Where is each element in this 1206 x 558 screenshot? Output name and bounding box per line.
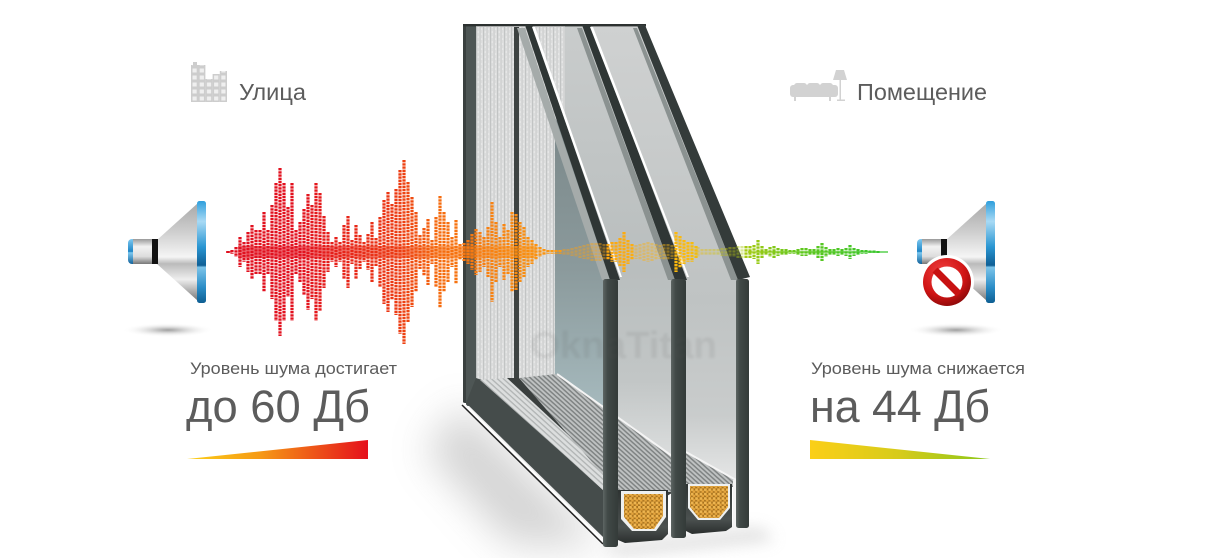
white frame edge xyxy=(463,403,603,541)
glass between first and second pane xyxy=(565,26,680,470)
third sill white trim xyxy=(686,452,736,480)
right value: на 44 Дб xyxy=(810,381,990,432)
pane 1 diagonal edge xyxy=(517,25,622,280)
wave: tail xyxy=(226,251,888,253)
right speaker shadow xyxy=(908,323,1004,337)
right speaker xyxy=(917,201,995,303)
triple glazed window unit xyxy=(462,24,750,547)
left level bar xyxy=(187,440,368,459)
left value: до 60 Дб xyxy=(186,381,370,432)
wave: loud street part xyxy=(228,160,560,344)
inner glass xyxy=(555,118,618,420)
front bar 1 xyxy=(603,279,618,547)
glass between second and third pane xyxy=(586,26,744,484)
second spacer hatch xyxy=(519,27,615,420)
shadow under glass edges xyxy=(600,528,775,556)
right level bar xyxy=(810,440,990,459)
wave: yellow and green part xyxy=(608,232,878,272)
frame left strip xyxy=(463,25,476,406)
icon: city buildings xyxy=(191,62,227,102)
second sill white trim xyxy=(557,374,672,456)
front frame bottom diagonal xyxy=(466,378,603,537)
second cartridge xyxy=(686,484,732,534)
right caption: Уровень шума снижается xyxy=(811,359,1025,378)
pane 2 diagonal edge xyxy=(577,25,689,280)
inner frame strip xyxy=(514,27,519,379)
second sill xyxy=(519,374,672,492)
wave: faded through glass xyxy=(564,242,742,262)
first sill xyxy=(480,378,606,492)
third sill xyxy=(686,453,736,487)
left speaker shadow xyxy=(122,323,214,337)
front bar 3 xyxy=(736,279,749,528)
sound wave xyxy=(226,160,888,344)
spacer hatch behind first pane xyxy=(476,27,514,382)
white gap right of third pane bottom xyxy=(733,480,736,528)
window floor shadow xyxy=(425,405,603,545)
left speaker xyxy=(128,201,206,303)
icon: sofa and lamp xyxy=(790,70,847,101)
left caption: Уровень шума достигает xyxy=(190,359,397,378)
heading: street: Улица xyxy=(239,79,306,105)
first cartridge xyxy=(618,490,668,543)
dark channel xyxy=(507,378,672,497)
wave: dense centre band xyxy=(238,246,536,258)
pane 3 diagonal edge xyxy=(633,25,750,280)
heading: room: Помещение xyxy=(857,79,987,105)
prohibition sign xyxy=(920,255,974,309)
watermark: OknaTitan xyxy=(530,325,717,367)
dark frame edge xyxy=(462,405,603,544)
front bar 2 xyxy=(671,279,686,538)
top edge xyxy=(463,24,646,26)
